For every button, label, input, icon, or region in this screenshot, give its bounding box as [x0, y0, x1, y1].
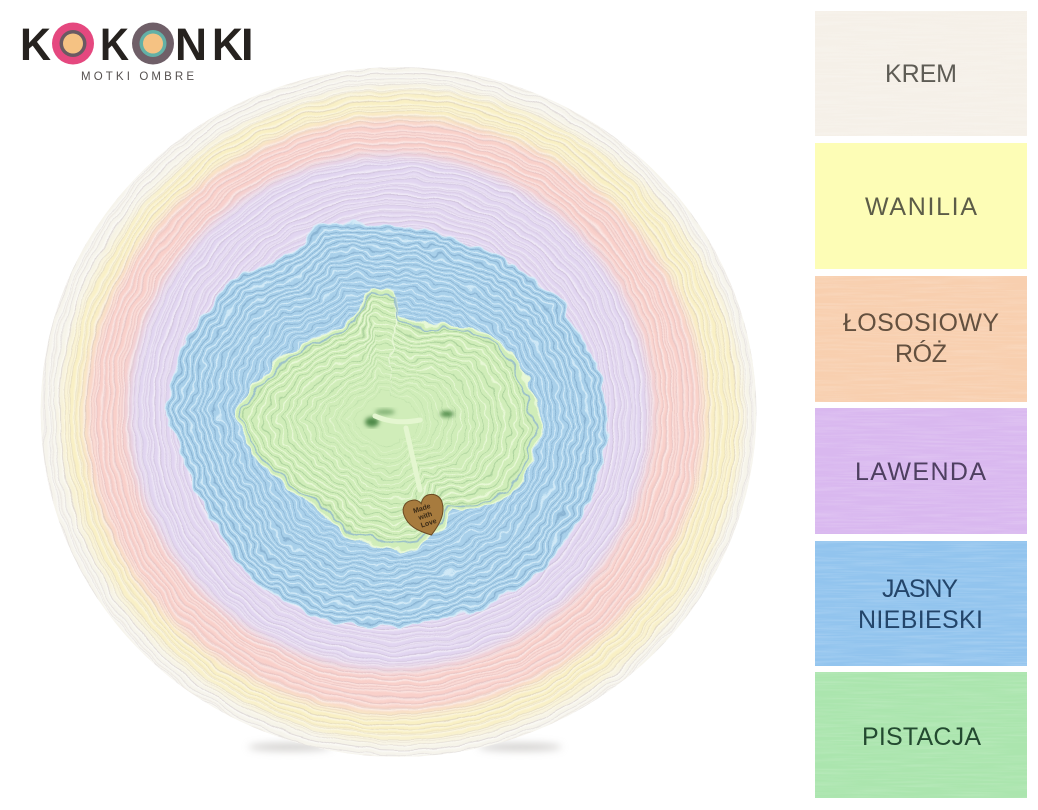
swatch: krem: KREM [885, 60, 957, 88]
yarn cake [36, 63, 760, 761]
centre opening [365, 409, 454, 427]
colour swatches [815, 11, 1027, 798]
heart charm: Made [412, 503, 432, 515]
outer cream band [40, 67, 756, 757]
swatch: łososiowy róż: ŁOSOSIOWY [843, 309, 999, 337]
blue strand lines [165, 222, 610, 628]
pistachio centre [235, 287, 540, 550]
vanilla band [62, 89, 742, 741]
logo ring: pink [52, 22, 94, 64]
logo wordmark: I [241, 19, 254, 70]
centre strand [375, 416, 420, 490]
swatch: wanilia: WANILIA [865, 193, 977, 221]
logo [20, 19, 254, 83]
swatch: pistacja: PISTACJA [862, 723, 981, 751]
logo wordmark: N [175, 19, 207, 70]
heart charm: Love [420, 518, 438, 530]
swatch: wanilia [815, 143, 1027, 269]
swatch: jasny niebieski: NIEBIESKI [858, 606, 983, 634]
swatch: krem [815, 11, 1027, 136]
logo wordmark [20, 19, 254, 70]
shadow under yarn cake [248, 743, 562, 751]
salmon pink band [85, 118, 705, 712]
swatch: lawenda: LAWENDA [855, 458, 986, 486]
swatch: jasny niebieski: JASNY [882, 575, 958, 603]
swatch: lawenda [815, 408, 1027, 534]
swatch: jasny niebieski [815, 541, 1027, 666]
swatch: łososiowy róż: RÓŻ [895, 339, 947, 368]
heart charm: with [417, 511, 433, 522]
logo ring: plum [132, 22, 174, 64]
outer strand lines [36, 63, 760, 761]
logo wordmark: K [100, 19, 129, 70]
logo tagline: MOTKI OMBRE [81, 71, 194, 83]
swatch: łososiowy róż [815, 276, 1027, 402]
swatch: pistacja [815, 672, 1027, 798]
logo wordmark: K [20, 19, 51, 70]
logo wordmark: K [212, 19, 243, 70]
pistachio strand lines [235, 287, 540, 550]
heart charm [400, 491, 451, 541]
lavender band [128, 154, 652, 670]
light blue band [165, 222, 610, 628]
